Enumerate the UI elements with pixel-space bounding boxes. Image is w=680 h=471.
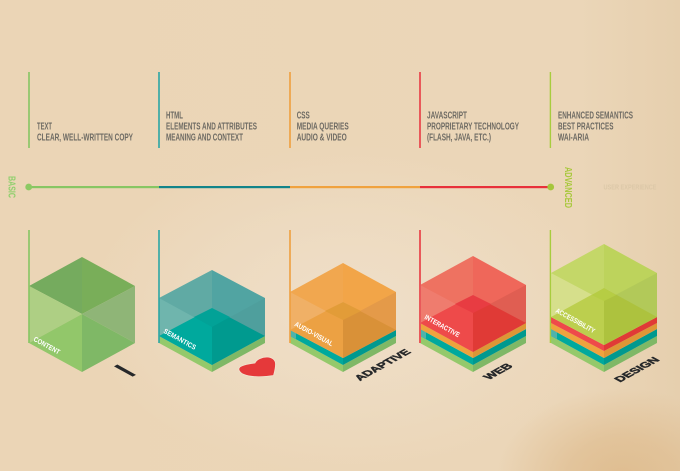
word: design: DESIGN xyxy=(612,356,663,384)
column: javascript: (FLASH, JAVA, ETC.) xyxy=(427,132,491,144)
column: css: CSS xyxy=(297,110,310,122)
column: html: MEANING AND CONTEXT xyxy=(166,132,243,144)
word: I: I xyxy=(107,361,144,381)
label: semantics: SEMANTICS xyxy=(162,328,197,352)
label: user experience: USER EXPERIENCE xyxy=(604,185,657,192)
label: content: CONTENT xyxy=(32,336,61,357)
word: adaptive: ADAPTIVE xyxy=(352,348,414,382)
column: text: CLEAR, WELL-WRITTEN COPY xyxy=(37,132,133,144)
column: javascript xyxy=(419,72,519,148)
cube: semantics xyxy=(158,230,265,372)
column: enhanced semantics xyxy=(550,72,633,148)
label: interactive: INTERACTIVE xyxy=(423,314,461,339)
column: css: MEDIA QUERIES xyxy=(297,122,349,132)
column: enhanced semantics: WAI-ARIA xyxy=(558,132,589,144)
column: enhanced semantics: ENHANCED SEMANTICS xyxy=(558,110,633,122)
word: web: WEB xyxy=(481,362,516,381)
column: html: ELEMENTS AND ATTRIBUTES xyxy=(166,122,257,132)
label: accessibility: ACCESSIBILITY xyxy=(554,308,596,335)
column: css xyxy=(289,72,349,148)
column: text xyxy=(28,72,133,148)
cube: accessibility xyxy=(550,230,657,372)
cube: interactive xyxy=(419,230,526,372)
column: html: HTML xyxy=(166,110,183,122)
column: enhanced semantics: BEST PRACTICES xyxy=(558,122,614,132)
label: audio-visual: AUDIO-VISUAL xyxy=(293,321,335,348)
cube: audio-visual xyxy=(289,230,396,372)
cube: content xyxy=(28,230,135,372)
column: javascript: PROPRIETARY TECHNOLOGY xyxy=(427,122,519,132)
column: html xyxy=(158,72,257,148)
label: basic: BASIC xyxy=(5,176,16,198)
column: text: TEXT xyxy=(37,122,52,132)
column: javascript: JAVASCRIPT xyxy=(427,110,467,122)
word: heart xyxy=(239,357,276,377)
timeline xyxy=(25,184,554,190)
label: advanced: ADVANCED xyxy=(562,167,573,208)
column: css: AUDIO & VIDEO xyxy=(297,132,347,144)
